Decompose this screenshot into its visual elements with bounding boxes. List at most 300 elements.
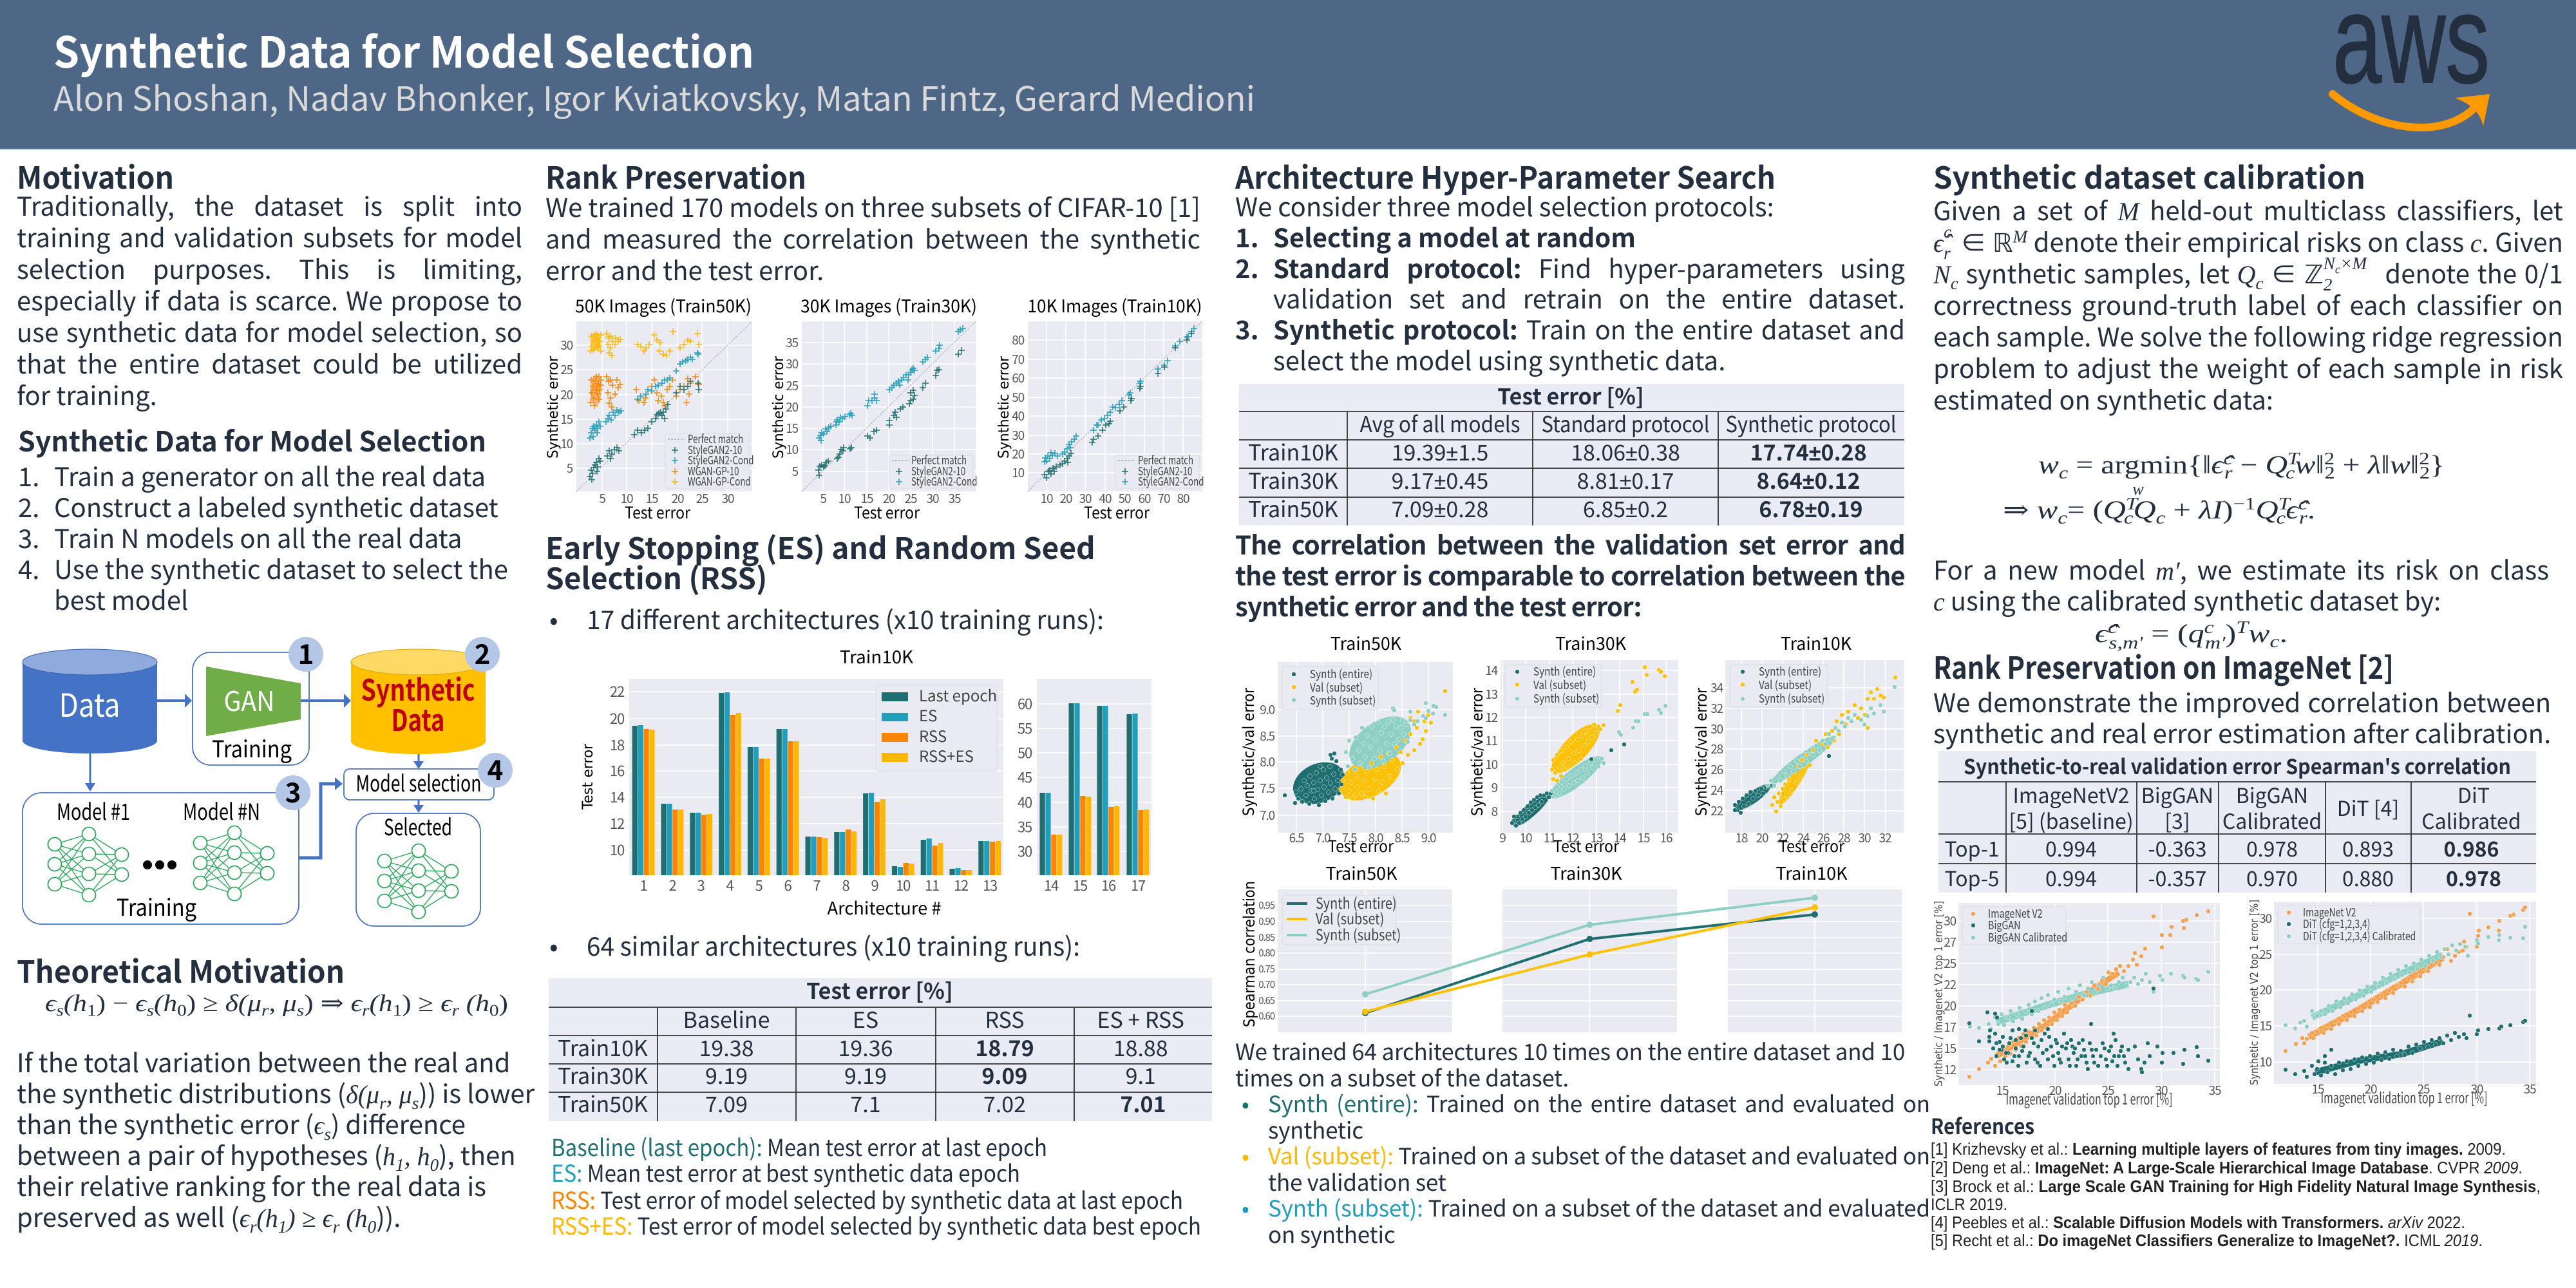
table: protocol test error: Train10K	[1248, 435, 1338, 467]
chart: imagenet scatter dit: 20	[2259, 981, 2272, 998]
heading: theoretical motivation: Theoretical Motivation	[17, 947, 345, 992]
text: rank preservation	[545, 187, 1200, 288]
chart: cifar scatter 10K: 40	[1099, 489, 1112, 507]
formula: ranking bound: ) ⇒	[304, 990, 351, 1017]
formula: ridge regression: 2	[2324, 449, 2334, 468]
table: protocol test error: Test error [%]	[1497, 379, 1644, 411]
table: test error by method: 19.36	[838, 1031, 893, 1063]
chart: validation scatter 10K: 18	[1736, 829, 1748, 846]
formula: ranking bound: ϵ	[135, 990, 145, 1017]
text: correlation finding: synthetic error and the test error:	[1235, 587, 1642, 624]
chart: imagenet scatter dit: 15	[2312, 1080, 2324, 1097]
formula: ridge regression: c	[2224, 449, 2233, 468]
box: training models: Model #N	[183, 794, 260, 827]
chart: imagenet scatter biggan: 22	[1944, 976, 1956, 993]
text: motivation: that the entire dataset could be utilized	[17, 344, 522, 381]
text: calibration description: c	[1944, 222, 1951, 242]
heading: motivation: Motivation	[17, 153, 174, 198]
chart: cifar scatter 50K: 10	[621, 489, 633, 507]
chart: imagenet scatter dit: Imagenet validation top 1 error [%]	[2321, 1086, 2487, 1108]
text: model selection protocols: 2.	[1235, 249, 1259, 286]
text: calibration description: estimated on synthetic data:	[1933, 380, 2273, 417]
table: spearman correlation: [5] (baseline)	[2009, 806, 2134, 835]
table: spearman correlation: Calibrated	[2421, 806, 2521, 835]
chart: cifar scatter 10K: 10	[1041, 489, 1053, 507]
chart: cifar scatter 50K: StyleGAN2-10	[688, 441, 742, 458]
table: spearman correlation: 0.978	[2246, 833, 2298, 863]
formula: risk estimate: m′	[2205, 633, 2226, 652]
text: rank preservation: and measured the correlation between the synthetic	[545, 219, 1200, 256]
chart: validation scatter 50K: 9.0	[1260, 701, 1275, 718]
references: [5] Recht et al.: Do imageNet Classifiers Generalize to ImageNet?. ICML 2019.	[1931, 1231, 2483, 1250]
formula: ranking bound: , μ	[269, 990, 297, 1017]
chart: imagenet scatter dit: 20	[2365, 1080, 2377, 1097]
chart: validation scatter 10K: Train10K	[1781, 630, 1852, 655]
list: synthetic data steps: Use the synthetic dataset to select the	[54, 549, 508, 587]
chart: cifar scatter 10K: 10	[1012, 464, 1025, 481]
chart: spearman correlation lines: Spearman correlation	[1240, 881, 1258, 1027]
chart: imagenet scatter biggan: 30	[1944, 912, 1956, 929]
text: calibration description	[1933, 191, 2563, 417]
text: theoretical motivation	[17, 1043, 535, 1236]
chart: cifar scatter 30K: Test error	[854, 500, 920, 524]
formula: ridge regression: ϵ̂	[2211, 450, 2235, 479]
chart: imagenet scatter biggan: Synthetic / Imagenet V2 top 1 error [%]	[1933, 901, 1946, 1086]
text: model selection protocols: 1.	[1235, 218, 1259, 255]
chart: validation scatter 50K: Synth (subset)	[1310, 692, 1376, 708]
chart: cifar scatter 10K: 20	[1012, 445, 1025, 462]
formula: ranking bound: r	[362, 1002, 370, 1019]
chart: cifar scatter 50K: 20	[560, 386, 573, 403]
references: [4] Peebles et al.: Scalable Diffusion Models with Transformers. arXiv 2022.	[1931, 1213, 2465, 1232]
chart: validation scatter 10K: 32	[1879, 829, 1891, 846]
legend: bars: ES	[919, 703, 937, 726]
formula: ranking bound: )	[499, 990, 508, 1017]
chart: validation scatter 50K: 7.5	[1260, 779, 1275, 797]
chart: cifar scatter 50K: Synthetic error	[545, 355, 562, 459]
chart: cifar scatter 10K: 60	[1012, 369, 1025, 386]
chart: imagenet scatter dit: 30	[2259, 909, 2272, 927]
formula: ridge regression: 2	[2419, 449, 2429, 468]
list: synthetic data steps: Train a generator on all the real data	[54, 457, 486, 494]
table: spearman correlation: 0.880	[2342, 863, 2394, 893]
chart: bar chart train10K: 20	[610, 708, 625, 728]
chart: cifar scatter 50K: StyleGAN2-Cond	[688, 451, 753, 468]
chart: cifar scatter 50K: 50K Images (Train50K)	[575, 292, 752, 317]
text: correlation finding: the test error is comparable to correlation between the	[1235, 556, 1905, 593]
chart: validation scatter 30K: 12	[1567, 829, 1579, 846]
text: model selection protocols: select the model using synthetic data.	[1273, 341, 1725, 378]
heading: rank preservation: Rank Preservation	[545, 153, 806, 198]
header banner	[0, 0, 2576, 150]
formula: ridge regression: T	[2126, 494, 2139, 513]
chart: bar chart train10K: 12	[954, 875, 969, 895]
table: test error by method: Train10K	[558, 1031, 648, 1063]
table: spearman correlation: 0.994	[2045, 833, 2097, 863]
chart: imagenet scatter biggan: 20	[2049, 1081, 2061, 1099]
text: model selection protocols: We consider three model selection protocols:	[1235, 187, 1774, 224]
chart: cifar scatter 10K: 30	[1012, 426, 1025, 444]
text: 2.	[18, 488, 39, 525]
list: synthetic data steps: Train N models on all the real data	[54, 518, 462, 556]
list: synthetic data steps: best model	[54, 580, 188, 618]
icon: aws logo	[2333, 0, 2490, 128]
chart: validation scatter 30K: 14	[1485, 661, 1498, 679]
badge 3: 3	[285, 772, 301, 811]
chart: imagenet scatter biggan: 30	[2155, 1081, 2168, 1099]
chart: imagenet scatter dit: 25	[2418, 1080, 2430, 1097]
chart: imagenet scatter biggan: 20	[1944, 997, 1956, 1014]
text: new model risk	[1933, 550, 2549, 618]
table: test error by method	[549, 974, 1212, 1121]
chart: cifar scatter 30K: 10	[786, 440, 799, 458]
text: calibration description: r	[1944, 243, 1951, 263]
chart: validation scatter 30K: 9	[1499, 829, 1506, 846]
box: training models	[23, 793, 299, 924]
formula: ranking bound: (h	[154, 990, 177, 1017]
legend text: method definitions	[551, 1130, 1201, 1242]
chart: validation scatter 50K	[1240, 630, 1453, 857]
text: experiment description	[1235, 1034, 1905, 1094]
text: calibration description: Nc×M	[2324, 254, 2367, 276]
chart: imagenet scatter dit: 15	[2259, 1017, 2272, 1034]
table: test error by method: 9.1	[1126, 1059, 1156, 1090]
chart: validation scatter 30K	[1468, 630, 1678, 857]
badge 2: 2	[475, 633, 490, 672]
table: test error by method: 9.09	[981, 1059, 1028, 1090]
text: calibration description: ϵ̂ ∈ ℝM denote their empirical risks on class c. Given	[1933, 222, 2563, 260]
formula: risk estimate: c	[2204, 618, 2214, 637]
list: synthetic data steps: Construct a labeled synthetic dataset	[54, 488, 498, 525]
bullet: 64 architectures: 64 similar architectures (x10 training runs):	[587, 926, 1080, 963]
chart: cifar scatter 50K: 20	[672, 489, 684, 507]
chart: cifar scatter 30K: 30K Images (Train30K)	[800, 292, 977, 317]
bars: rss	[647, 715, 1141, 875]
chart: bar chart train10K: 5	[755, 875, 762, 895]
chart: bar chart train10K: Architecture #	[827, 895, 942, 920]
text: 3.	[18, 518, 39, 556]
formula: ranking bound: ) −	[97, 990, 135, 1017]
chart: cifar scatter 30K: Perfect match	[911, 451, 967, 468]
formula: ridge regression: +	[2335, 450, 2368, 479]
bars: rss plus es	[652, 713, 1146, 875]
table: test error by method: 18.79	[975, 1031, 1034, 1063]
chart: cifar scatter 10K: StyleGAN2-10	[1138, 462, 1192, 479]
chart: imagenet scatter biggan: 27	[1944, 933, 1956, 951]
chart: cifar scatter 50K: 25	[696, 489, 708, 507]
formula: ridge regression: Q	[2134, 495, 2156, 524]
text: model selection protocols: 3.	[1235, 310, 1259, 347]
table: spearman correlation: 0.970	[2246, 863, 2298, 893]
formula: ridge regression: r	[2299, 508, 2307, 527]
chart: cifar scatter 30K: 10	[838, 489, 851, 507]
table: spearman correlation: [3]	[2164, 806, 2190, 835]
table: test error by method: 18.88	[1113, 1031, 1168, 1063]
heading: rank preservation on imagenet: Rank Preservation on ImageNet [2]	[1933, 643, 2394, 688]
chart: cifar scatter 30K: 25	[905, 489, 917, 507]
formula: ranking bound: s	[297, 1002, 304, 1019]
chart: validation scatter 10K: 22	[1710, 802, 1723, 819]
chart: bar chart train10K: Test error	[580, 743, 596, 810]
formula: ridge regression: r	[2224, 463, 2233, 482]
chart: cifar scatter 10K: Synthetic error	[996, 355, 1012, 459]
formula: risk estimate: c	[2108, 618, 2117, 637]
chart: imagenet scatter biggan: 15	[1944, 1039, 1956, 1057]
chart: cifar scatter 30K: StyleGAN2-Cond	[911, 473, 977, 489]
chart: validation scatter 30K: Train30K	[1555, 630, 1627, 655]
chart: cifar scatter 50K: Test error	[625, 500, 690, 524]
chart: bar chart train10K: 7	[813, 875, 820, 895]
bullet: 17 architectures: 17 different architectures (x10 training runs):	[587, 600, 1104, 637]
list: experiment legend: on synthetic	[1268, 1217, 1395, 1249]
text: theoretical motivation: preserved as well (ϵr(h1) ≥ ϵr (h0)).	[17, 1197, 401, 1236]
chart: spearman correlation lines: Train10K	[1776, 860, 1848, 885]
table: spearman correlation: Top-5	[1944, 863, 2000, 893]
box: gan training: Training	[212, 731, 292, 764]
chart: imagenet scatter biggan: 15	[1996, 1081, 2009, 1099]
chart: validation scatter 10K: 24	[1710, 781, 1723, 799]
text: rank preservation: error and the test error.	[545, 251, 824, 288]
table: spearman correlation: DiT [4]	[2337, 793, 2399, 822]
formula: ranking bound: ϵ	[45, 990, 55, 1017]
chart: cifar scatter 50K: WGAN-GP-Cond	[688, 473, 751, 489]
chart: validation scatter 10K: 30	[1859, 829, 1871, 846]
references: ICLR 2019.	[1931, 1195, 2007, 1214]
formula: ridge regression: c	[2058, 508, 2067, 527]
text: motivation: Traditionally, the dataset is split into	[17, 186, 522, 223]
table: test error by method: 9.19	[844, 1059, 887, 1090]
chart: bar chart train10K: 22	[610, 681, 625, 701]
chart: cifar scatter 30K: 5	[820, 489, 826, 507]
chart: validation scatter 30K: 13	[1485, 685, 1498, 703]
formula: ridge regression: w	[2295, 450, 2316, 479]
formula: ridge regression: c	[2156, 508, 2165, 527]
formula: ridge regression: }	[2430, 450, 2445, 479]
text: experiment description: We trained 64 architectures 10 times on the entire dataset and 10	[1235, 1034, 1905, 1067]
text: model selection protocols	[1235, 187, 1905, 378]
chart: cifar scatter 10K: 50	[1012, 388, 1025, 406]
chart: validation scatter 30K: Synth (subset)	[1533, 690, 1599, 706]
table: protocol test error: 6.78±0.19	[1759, 492, 1863, 524]
formula: ranking bound: 1	[87, 1002, 97, 1019]
chart: bar chart train10K: 50	[1018, 742, 1032, 762]
badge 4: 4	[488, 749, 503, 788]
formula: ranking bound: 0	[489, 1002, 499, 1019]
chart: validation scatter 30K: 12	[1485, 708, 1498, 726]
chart: bar chart train10K: 14	[610, 786, 625, 807]
table: protocol test error: 18.06±0.38	[1571, 435, 1680, 467]
chart: bar chart train10K: 45	[1018, 766, 1032, 787]
bars: last epoch	[635, 693, 1130, 875]
chart: bar chart train10K: Train10K	[840, 643, 914, 668]
badge 4	[478, 749, 513, 788]
text: new model risk: c using the calibrated synthetic dataset by:	[1933, 581, 2441, 618]
formula: ridge regression: ‖	[2315, 450, 2324, 479]
table: test error by method: 7.01	[1120, 1087, 1166, 1119]
formula: risk estimate: c	[2270, 632, 2280, 651]
formula: ranking bound: δ(μ	[225, 990, 256, 1017]
chart: imagenet scatter biggan	[1933, 901, 2221, 1109]
box: gan training	[193, 652, 309, 765]
chart: validation scatter 30K: 8	[1492, 802, 1498, 820]
heading: synthetic data for model selection: Synthetic Data for Model Selection	[18, 420, 486, 460]
chart: cifar scatter 50K	[545, 292, 753, 524]
cylinder: synthetic data: Synthetic	[361, 667, 475, 710]
chart: spearman correlation lines: Train30K	[1550, 860, 1622, 885]
chart: imagenet scatter dit: DiT (cfg=1,2,3,4) Calibrated	[2303, 927, 2416, 944]
bars: es	[641, 692, 1135, 875]
chart: validation scatter 30K: 9	[1492, 779, 1498, 796]
text: motivation: training and validation subsets for model	[17, 218, 522, 255]
chart: cifar scatter 30K: 15	[861, 489, 873, 507]
formula: risk estimate: s,m′	[2108, 633, 2144, 652]
chart: bar chart train10K: 35	[1018, 816, 1032, 837]
chart: imagenet scatter dit: ImageNet V2	[2303, 903, 2356, 920]
chart: validation scatter 50K: Synthetic/val error	[1240, 688, 1258, 816]
formula: risk estimate: .	[2279, 619, 2287, 648]
table: spearman correlation: 0.994	[2045, 863, 2097, 893]
chart: spearman correlation lines: 0.95	[1258, 898, 1275, 912]
chart: bar chart train10K: 12	[610, 813, 625, 833]
arrow: gan to synthetic	[301, 694, 351, 708]
formula: risk estimate: w	[2248, 619, 2270, 648]
formula: ridge regression: .	[2307, 495, 2315, 524]
legend: bars: RSS+ES	[919, 744, 974, 766]
chart: bar chart train10K: 9	[871, 875, 878, 895]
chart: cifar scatter 30K: 20	[883, 489, 895, 507]
chart: spearman correlation lines: 0.60	[1258, 1009, 1275, 1023]
formula: ranking bound: (h	[369, 990, 393, 1017]
chart: validation scatter 10K: 24	[1797, 829, 1810, 846]
text: model selection protocols: Standard protocol: Find hyper-parameters using	[1273, 249, 1905, 286]
text: new model risk: For a new model m′, we estimate its risk on class	[1933, 550, 2549, 587]
chart: validation scatter 50K: Val (subset)	[1310, 679, 1363, 695]
chart: cifar scatter 10K: 40	[1012, 407, 1025, 424]
formula: ridge regression: −1	[2233, 494, 2255, 513]
chart: validation scatter 10K: 26	[1817, 829, 1830, 846]
chart: validation scatter 50K: 8.5	[1260, 727, 1275, 744]
chart: validation scatter 10K: 28	[1710, 740, 1723, 757]
chart: spearman correlation lines: 0.90	[1258, 914, 1275, 928]
chart: bar chart train10K: 10	[610, 839, 625, 860]
formula: ridge regression: Q	[2266, 450, 2287, 479]
formula: ridge regression: 2	[2325, 463, 2335, 482]
text: imagenet description: We demonstrate the improved correlation between	[1933, 683, 2551, 720]
chart: validation scatter 10K	[1692, 630, 1904, 857]
chart: bar chart train10K: 10	[896, 875, 911, 895]
text: correlation finding: The correlation between the validation set error and	[1235, 525, 1905, 562]
formula: ridge regression: c	[2059, 463, 2068, 482]
chart: imagenet scatter dit: 30	[2471, 1080, 2483, 1097]
table: protocol test error: 7.09±0.28	[1392, 492, 1488, 524]
chart: bar chart train10K: 17	[1131, 875, 1146, 895]
chart: spearman correlation lines: 0.65	[1258, 994, 1275, 1007]
chart: cifar scatter 10K: 60	[1139, 489, 1151, 507]
diagram: pipeline	[23, 633, 513, 926]
list: experiment legend: Val (subset): Trained on a subset of the dataset and evaluated on	[1268, 1139, 1930, 1171]
legend text: method definitions: Baseline (last epoch): Mean test error at last epoch	[551, 1130, 1047, 1163]
chart: bar chart train10K: 40	[1018, 791, 1032, 812]
list: experiment legend	[1242, 1086, 1930, 1249]
text: •	[1242, 1191, 1249, 1224]
chart: validation scatter 10K: 34	[1710, 679, 1723, 696]
chart: validation scatter 50K: 8.5	[1395, 829, 1410, 846]
text: correlation finding	[1235, 525, 1905, 624]
box: training models: Model #1	[57, 794, 130, 827]
chart: validation scatter 10K: Val (subset)	[1759, 676, 1812, 692]
formula: ranking bound: s	[147, 1002, 154, 1019]
text: imagenet description: synthetic and real error estimation after calibration.	[1933, 714, 2551, 751]
table: test error by method: 9.19	[705, 1059, 748, 1090]
table: protocol test error: 19.39±1.5	[1392, 435, 1488, 467]
table: protocol test error: Synthetic protocol	[1726, 407, 1896, 439]
references: [2] Deng et al.: ImageNet: A Large-Scale Hierarchical Image Database. CVPR 2009.	[1931, 1158, 2523, 1177]
text: 1.	[18, 457, 39, 494]
heading: early stopping: Selection (RSS)	[545, 556, 767, 598]
table: spearman correlation: -0.357	[2148, 863, 2207, 893]
formula: risk estimate: = (	[2143, 619, 2188, 648]
chart: imagenet scatter biggan: 25	[2102, 1081, 2114, 1099]
formula: ranking bound: ) ≥	[402, 990, 440, 1017]
chart: cifar scatter 50K: 5	[599, 489, 605, 507]
chart: bar chart train10K	[580, 643, 1151, 920]
text: model selection protocols: Selecting a model at random	[1273, 218, 1636, 255]
chart: cifar scatter 30K: 30	[927, 489, 939, 507]
table: test error by method: RSS	[985, 1003, 1025, 1034]
heading: early stopping: Early Stopping (ES) and Random Seed	[545, 526, 1095, 568]
table: test error by method: ES	[853, 1003, 878, 1034]
arrow: synthetic to selection	[413, 754, 424, 769]
chart: validation scatter 50K: Train50K	[1331, 630, 1402, 655]
chart: bar chart train10K: 18	[610, 734, 625, 755]
legend text: method definitions: RSS+ES: Test error of model selected by synthetic data best epoch	[551, 1208, 1201, 1242]
chart: bar chart train10K: 13	[983, 875, 997, 895]
text: calibration description: each sample. We solve the following ridge regression	[1933, 317, 2563, 354]
table: protocol test error: 17.74±0.28	[1750, 435, 1867, 467]
table: spearman correlation: Top-1	[1944, 833, 2000, 863]
chart: spearman correlation lines: Synth (subset)	[1316, 923, 1401, 945]
chart: spearman correlation lines: 0.75	[1258, 962, 1275, 976]
formula: ridge regression: = argmin{‖	[2068, 450, 2211, 479]
box: training models: Training	[117, 889, 196, 923]
chart: cifar scatter 50K: 5	[567, 459, 573, 477]
badge 3	[276, 772, 310, 811]
table: test error by method: 19.38	[699, 1031, 753, 1063]
chart: validation scatter 30K: 15	[1638, 829, 1650, 846]
chart: bar chart train10K: 16	[1101, 875, 1116, 895]
box: selected model	[356, 810, 480, 926]
text: •	[1242, 1139, 1249, 1171]
table: spearman correlation: Calibrated	[2222, 806, 2322, 835]
chart: cifar scatter 30K: 35	[786, 334, 799, 351]
chart: bar chart train10K: 14	[1044, 875, 1059, 895]
chart: validation scatter 50K: 9.0	[1421, 829, 1436, 846]
formula: ranking bound: r	[452, 1002, 459, 1019]
list: synthetic data steps	[18, 457, 508, 618]
chart: cifar scatter 30K	[771, 292, 977, 524]
chart: validation scatter 50K: 6.5	[1289, 829, 1304, 846]
list: experiment legend: Synth (entire): Trained on the entire dataset and evaluated on	[1268, 1086, 1930, 1119]
chart: cifar scatter 30K: Synthetic error	[771, 355, 787, 459]
badge 1	[289, 633, 323, 672]
chart: cifar scatter 10K: Test error	[1084, 500, 1150, 524]
chart: cifar scatter 50K: WGAN-GP-10	[688, 462, 739, 479]
table: protocol test error: Train30K	[1248, 464, 1338, 495]
chart: spearman correlation lines: Synth (entire)	[1316, 892, 1397, 914]
chart: cifar scatter 10K: 80	[1177, 489, 1189, 507]
title: Synthetic Data for Model Selection	[53, 19, 754, 80]
chart: validation scatter 30K: 16	[1660, 829, 1672, 846]
